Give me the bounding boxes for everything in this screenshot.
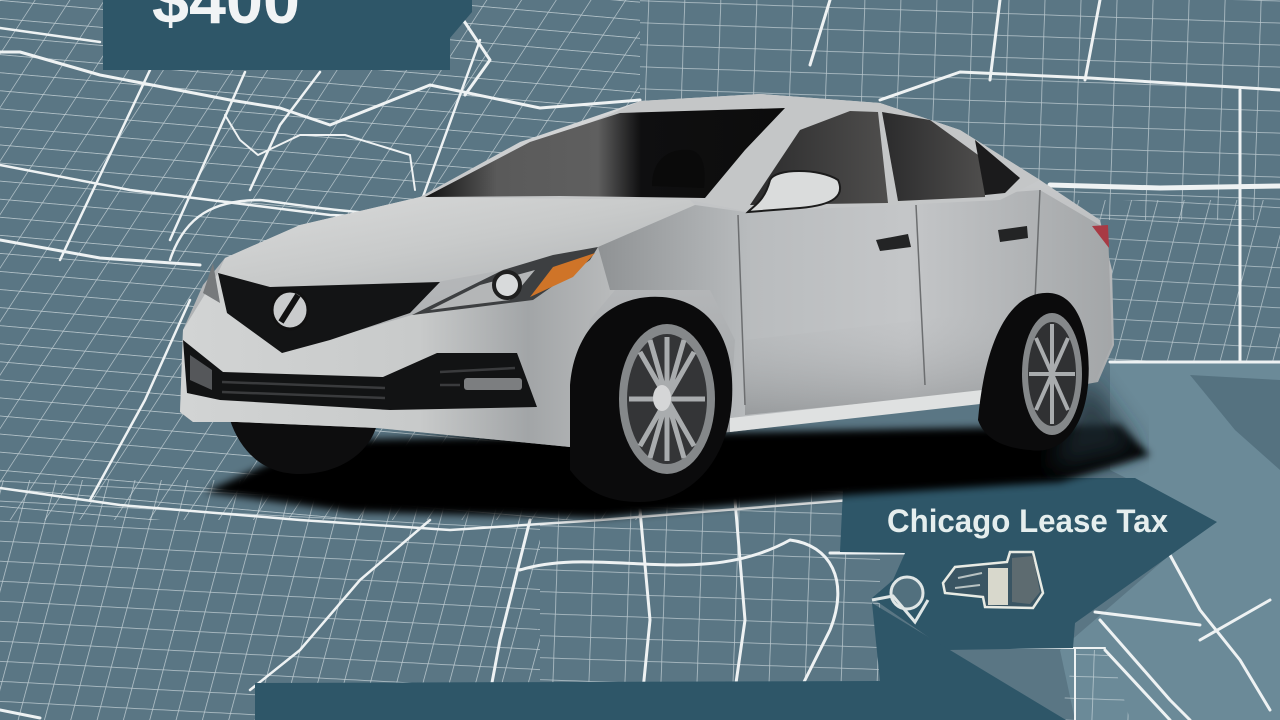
fog lamp: [190, 355, 212, 390]
tail light: [1092, 225, 1109, 248]
rear side window: [882, 112, 985, 201]
bottom arrow banner: [255, 603, 1066, 720]
far headlight: [203, 263, 220, 303]
car: [180, 94, 1150, 518]
seat silhouette: [652, 150, 705, 188]
lease tax arrow banner: [840, 478, 1217, 650]
icon: small car sketch: [872, 552, 1043, 622]
grille and nose: [218, 273, 440, 353]
lease tax label: Chicago Lease Tax: [887, 503, 1168, 539]
ground shadow: [205, 425, 1150, 518]
rear wheel: [978, 293, 1089, 451]
hood: [218, 197, 695, 287]
windshield: [425, 108, 785, 198]
badge: [272, 291, 308, 329]
side mirror: [748, 171, 840, 212]
headlight: [412, 247, 598, 315]
rear quarter window: [975, 140, 1020, 195]
price banner: [103, 0, 472, 70]
lower grille: [183, 340, 537, 410]
door seam: [738, 190, 1040, 405]
roof and pillars: [420, 94, 1040, 212]
side panel: [598, 190, 1112, 418]
far front wheel: [230, 420, 378, 474]
rocker: [730, 388, 1000, 432]
car body: [180, 94, 1114, 447]
front side window: [750, 111, 888, 205]
door handles: [876, 234, 911, 251]
front bumper: [180, 248, 615, 447]
front wheel: [570, 297, 732, 502]
lower door shade: [745, 310, 1010, 415]
